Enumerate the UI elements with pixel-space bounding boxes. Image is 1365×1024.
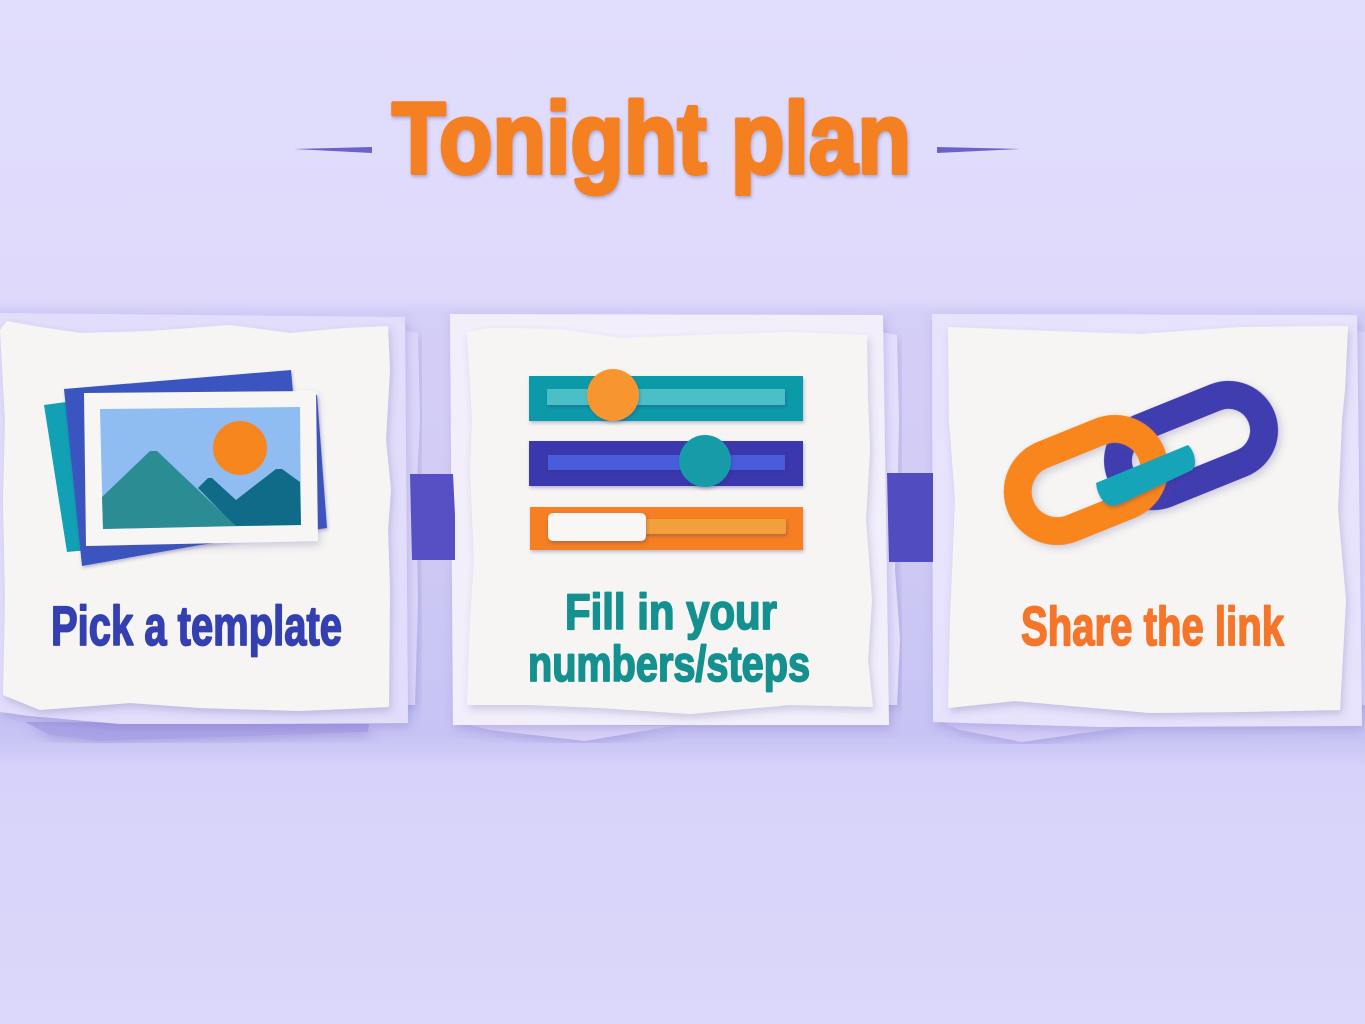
label line 1: Fill in your bbox=[565, 584, 777, 640]
panel: step 1 pick a template bbox=[0, 313, 420, 741]
teal knob bbox=[679, 435, 731, 487]
teal back sheet bbox=[44, 396, 110, 552]
label: Pick a template: Pick a template bbox=[51, 594, 342, 657]
title: Tonight plan with side dashes bbox=[294, 83, 1020, 195]
blue back sheet bbox=[64, 370, 327, 566]
white handle bbox=[548, 513, 646, 541]
white torn paper card bbox=[0, 321, 391, 711]
middle paper sheet bbox=[450, 314, 889, 725]
orange slider base bbox=[530, 507, 803, 550]
under sheet lower edge bbox=[465, 724, 672, 741]
back mountain bbox=[198, 469, 301, 526]
connector strip: card 2 to card 3 bbox=[887, 473, 933, 562]
left title dash bbox=[294, 147, 372, 153]
icon: chain link bbox=[1006, 384, 1275, 543]
orange knob bbox=[587, 369, 639, 421]
middle paper sheet bbox=[0, 313, 408, 724]
white photo frame bbox=[84, 391, 318, 546]
blue slider track bbox=[548, 455, 785, 470]
white torn paper card bbox=[467, 328, 873, 714]
white torn paper card bbox=[948, 326, 1348, 713]
under sheet right edge bbox=[1350, 330, 1365, 705]
blue slider bbox=[529, 435, 803, 487]
orange link bbox=[1006, 417, 1166, 543]
label line 2: numbers/steps bbox=[528, 636, 810, 692]
under sheet lower edge bbox=[25, 722, 369, 741]
connector strip: card 1 to card 2 bbox=[410, 474, 455, 560]
orange slider bbox=[530, 507, 803, 550]
orange slider track bbox=[548, 519, 786, 534]
panel: step 2 fill in your numbers bbox=[450, 314, 900, 741]
title text: Tonight plan bbox=[392, 83, 911, 195]
icon: picture cards bbox=[44, 370, 327, 566]
middle paper sheet bbox=[932, 314, 1362, 727]
under sheet lower edge bbox=[942, 722, 1132, 742]
under sheet right edge bbox=[400, 330, 420, 705]
panel: step 3 share the link bbox=[932, 314, 1365, 742]
teal clasp bbox=[1096, 445, 1195, 506]
front mountain bbox=[102, 451, 236, 529]
teal slider base bbox=[529, 376, 803, 421]
label: Fill in your numbers/steps bbox=[528, 584, 810, 692]
teal slider track bbox=[547, 389, 785, 405]
teal slider bbox=[529, 369, 803, 421]
icon: sliders bbox=[529, 369, 803, 550]
sky bbox=[100, 407, 301, 529]
blue link bbox=[1107, 384, 1275, 507]
sun bbox=[213, 421, 267, 475]
right title dash bbox=[937, 147, 1020, 153]
under sheet right edge bbox=[880, 332, 900, 705]
blue slider base bbox=[529, 441, 803, 486]
